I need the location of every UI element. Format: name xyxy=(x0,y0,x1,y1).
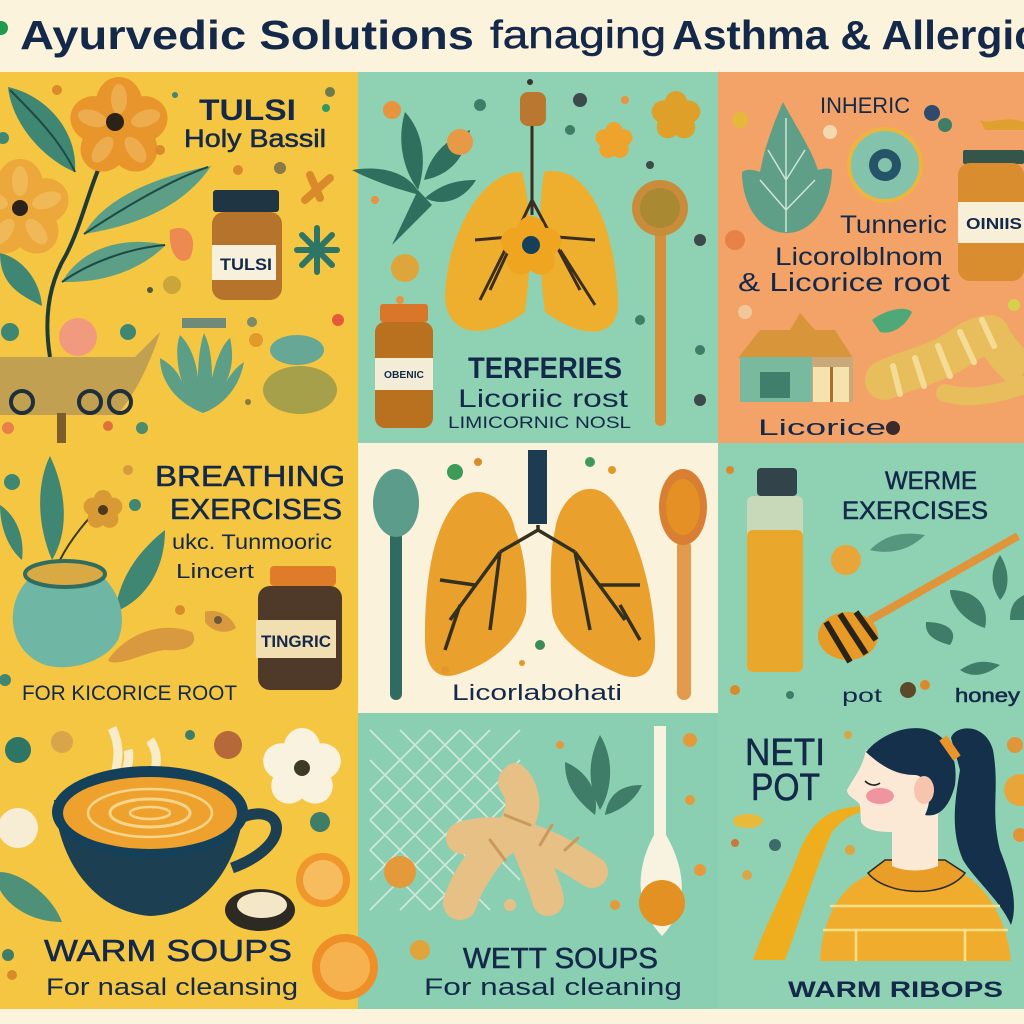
icon: orange slice xyxy=(296,853,350,907)
heading: breathing: BREATHING xyxy=(155,461,345,493)
icon: herb leaves xyxy=(870,534,1024,675)
icon: tulsi jar: TULSI xyxy=(220,255,272,274)
decoration: specks xyxy=(2,730,330,980)
decoration: specks xyxy=(441,457,616,674)
panel: tulsi xyxy=(0,72,358,443)
icon: tulsi bowl xyxy=(0,332,160,415)
icon: wooden spoon xyxy=(632,180,688,426)
icon: soup cup xyxy=(52,766,277,916)
text: licorice bottom: Licorice xyxy=(758,415,886,440)
icon: woman xyxy=(820,728,1014,961)
title: Asthma & Allergic xyxy=(672,12,1024,58)
panel: warm soups xyxy=(0,713,378,1009)
heading: werme: WERME xyxy=(885,467,977,495)
icon: honey dipper xyxy=(818,536,1018,662)
decoration: specks xyxy=(725,105,1024,435)
decoration: specks xyxy=(0,465,222,686)
text: warm bottom: WARM RIBOPS xyxy=(788,977,1003,1002)
icon: leaf xyxy=(0,872,62,922)
heading: exercises: EXERCISES xyxy=(842,497,988,525)
text: pot honey xyxy=(842,682,1021,707)
icon: white spoon xyxy=(639,726,685,936)
text: holy basil: Holy Bassil xyxy=(184,125,326,153)
icon: amber bottle: OBENIC xyxy=(384,370,424,381)
icon: ginger root xyxy=(885,320,1024,396)
text: licoric root: Licoriic rost xyxy=(458,385,628,413)
heading: tulsi: TULSI xyxy=(199,94,296,127)
title: Ayurvedic Solutions xyxy=(20,12,474,58)
heading: neti pot: POT xyxy=(751,767,820,809)
icon: left spoon xyxy=(373,469,419,700)
panel: neti pot xyxy=(718,713,1024,1009)
heading: terferies: TERFERIES xyxy=(468,352,622,385)
text: licorice root: & Licorice root xyxy=(738,267,951,297)
text: linoert: Lincert xyxy=(176,561,255,583)
decoration: specks xyxy=(726,466,930,699)
heading: warm soups: WARM SOUPS xyxy=(44,933,292,968)
icon: tulsi jar xyxy=(212,190,282,300)
title xyxy=(0,12,1024,58)
icon: large leaf xyxy=(742,102,832,233)
text: licorlabhati: Licorlabohati xyxy=(452,680,622,705)
panel: lungs center xyxy=(358,443,718,713)
text: licoric nosl: LIMICORNIC NOSL xyxy=(448,413,631,432)
lattice xyxy=(370,730,520,910)
heading: neti pot: NETI xyxy=(745,732,825,774)
text: tunmeric: Tunneric xyxy=(840,211,947,239)
decoration: specks xyxy=(0,85,344,434)
panel: lungs top xyxy=(352,72,718,443)
icon: herbs xyxy=(160,175,337,414)
icon: right spoon xyxy=(659,469,707,700)
icon: plant xyxy=(0,456,165,612)
icon: turmeric jar xyxy=(958,150,1024,281)
icon: water stream xyxy=(753,806,861,960)
icon: mushroom slice xyxy=(225,889,295,931)
icon: orange lungs xyxy=(425,450,655,677)
icon: herb sprig xyxy=(352,112,476,245)
icon: herb xyxy=(565,735,642,815)
icon: white bud xyxy=(0,808,38,848)
heading: neti pot xyxy=(745,732,825,809)
heading: inheric: INHERIC xyxy=(820,93,910,118)
title: fanaging xyxy=(490,14,666,57)
decoration: specks xyxy=(731,731,1024,880)
icon: teal pot xyxy=(13,561,122,667)
icon: orange splash xyxy=(831,545,861,575)
text: tumporic: ukc. Tunmooric xyxy=(172,531,332,554)
text: pot honey: pot xyxy=(842,686,883,707)
heading: exercises: EXERCISES xyxy=(170,494,342,526)
panel: breathing exercises xyxy=(0,443,358,713)
icon: ginger xyxy=(460,775,592,903)
icon: round seal xyxy=(849,129,921,201)
icon: orange large xyxy=(312,934,378,1000)
text: pot honey: honey xyxy=(955,686,1021,707)
icon: jar xyxy=(256,566,342,690)
icon: turmeric jar: OINIIS xyxy=(966,216,1022,233)
text: for nasal cleansing: For nasal cleansing xyxy=(46,974,298,1001)
decoration: flowers xyxy=(371,79,706,406)
icon: amber bottle xyxy=(375,304,433,428)
panel: werme exercises xyxy=(718,443,1024,713)
icon: juice bottle xyxy=(747,468,803,672)
icon: turmeric root xyxy=(108,611,236,662)
icon: yellow lungs xyxy=(445,92,618,332)
panel: wet soups xyxy=(358,713,718,1009)
icon: steam xyxy=(112,728,156,815)
icon: bowl rings xyxy=(11,391,131,413)
text: kicorice root: FOR KICORICE ROOT xyxy=(22,682,237,705)
icon: jar: TINGRIC xyxy=(261,632,331,651)
icon: peach flower xyxy=(59,318,97,356)
panel: turmeric and licorice xyxy=(718,72,1024,444)
icon: tulsi plant xyxy=(0,77,211,357)
icon: white flower xyxy=(258,728,346,811)
text: licorolblom: Licorolblnom xyxy=(775,243,943,271)
text: for nasal cleaning: For nasal cleaning xyxy=(424,974,682,1001)
heading: wet soups: WETT SOUPS xyxy=(463,943,658,975)
icon: house xyxy=(738,313,853,402)
icon: bowl stand xyxy=(57,413,66,443)
decoration: spots xyxy=(384,733,706,960)
